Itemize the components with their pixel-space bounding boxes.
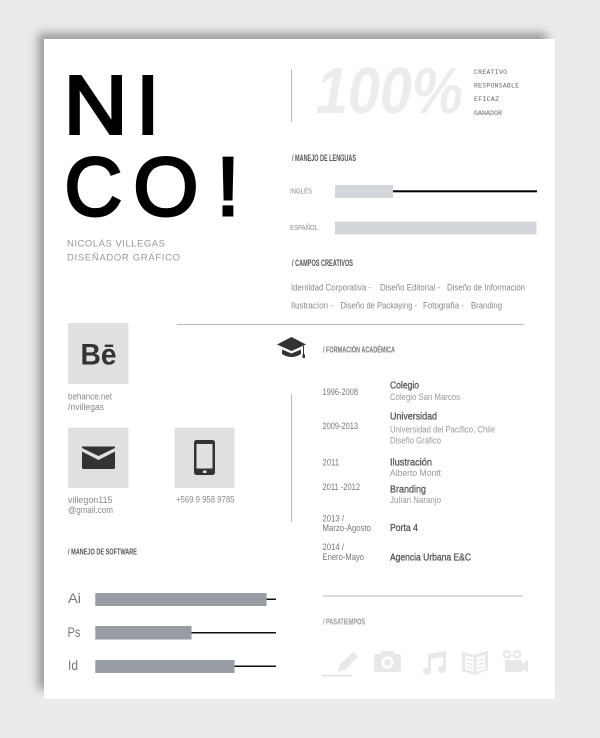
divider: top vertical line	[291, 69, 292, 122]
list: creative fields: Diseño de Packaying -	[340, 300, 417, 310]
list: creative fields: Identidad Corporativa -	[291, 282, 371, 292]
panel: behance contact: /nvillegas	[68, 402, 104, 412]
chart: languages	[290, 185, 537, 234]
entry: illustration: Alberto Montt	[390, 468, 441, 478]
icon: phone	[194, 440, 215, 475]
divider: lower horizontal rule	[323, 596, 523, 597]
entry: school: 1996-2008	[322, 387, 358, 397]
page shadow	[38, 33, 547, 689]
icon: graduation cap	[277, 337, 306, 358]
list: education timeline	[322, 380, 495, 564]
list: creative fields: Diseño Editorial -	[380, 282, 440, 292]
entry: Porta 4: 2013 /	[322, 514, 344, 524]
divider: education vertical line	[291, 394, 292, 522]
entry: illustration: 2011	[322, 458, 339, 468]
panel: email contact: villegon115	[68, 495, 112, 505]
title: NICO!	[64, 58, 240, 233]
panel: behance contact	[68, 323, 128, 412]
list: qualities: EFICAZ	[474, 96, 499, 103]
list: creative fields: Diseño de Información	[447, 282, 525, 292]
entry: school	[322, 380, 460, 402]
entry: Agencia Urbana	[322, 542, 471, 564]
title: NICO!: !	[216, 140, 240, 233]
name and role	[67, 238, 180, 264]
icon: pencil	[322, 652, 358, 676]
icon: behance: Bē	[80, 338, 116, 372]
list: qualities: GANADOR	[474, 110, 502, 117]
heading: hobbies: / PASATIEMPOS	[323, 616, 365, 626]
entry: university	[322, 412, 495, 446]
entry: university: Universidad del Pacífico, Chile	[390, 424, 495, 434]
entry: branding: Branding	[390, 484, 426, 496]
panel: email contact: @gmail.com	[68, 505, 113, 515]
icons: hobbies	[322, 650, 528, 676]
entry: illustration	[322, 458, 441, 478]
entry: Porta 4: Porta 4	[390, 523, 418, 534]
panel: behance contact: behance.net	[68, 392, 112, 402]
name and role: DISEÑADOR GRÁFICO	[67, 252, 180, 264]
entry: school: Colegio	[390, 380, 419, 392]
icon: film camera	[502, 650, 528, 672]
entry: branding	[322, 482, 441, 505]
list: creative fields	[291, 282, 525, 310]
panel: resume page	[44, 39, 555, 699]
panel: phone contact: +569 9 958 9785	[176, 494, 234, 504]
chart: software	[68, 590, 276, 673]
entry: illustration: Ilustración	[390, 458, 432, 468]
title: NICO!: C	[64, 140, 122, 233]
name and role: NICOLÁS VILLEGAS	[67, 238, 165, 250]
icon: camera	[374, 651, 401, 672]
title: NICO!: N	[64, 58, 128, 152]
icon: open book	[462, 650, 488, 675]
list: qualities	[474, 69, 519, 117]
entry: Porta 4	[322, 514, 418, 534]
entry: branding: Julían Naranjo	[390, 495, 441, 505]
list: qualities: CREATIVO	[474, 69, 507, 76]
heading: creative fields: / CAMPOS CREATIVOS	[292, 258, 353, 268]
entry: Porta 4: Marzo-Agosto	[322, 523, 371, 533]
panel: email contact	[68, 428, 128, 515]
entry: Agencia Urbana: Enero-Mayo	[322, 552, 364, 562]
list: qualities: RESPONSABLE	[474, 82, 519, 90]
list: creative fields: Branding	[471, 300, 502, 310]
list: creative fields: Fotografía -	[423, 300, 464, 310]
icon: envelope	[82, 446, 115, 469]
entry: university: 2009-2013	[322, 421, 358, 431]
entry: university: Universidad	[390, 412, 437, 422]
chart: languages: ESPAÑOL	[290, 223, 318, 232]
heading: education: / FORMACIÓN ACADÉMICA	[323, 344, 395, 354]
chart: software: Ai	[68, 590, 81, 606]
entry: Agencia Urbana: 2014 /	[322, 542, 344, 552]
entry: university: Diseño Gráfico	[390, 436, 441, 446]
chart: software: Id	[68, 657, 78, 673]
title: NICO!: I	[136, 58, 159, 152]
panel: phone contact	[174, 428, 234, 504]
heading: languages: / MANEJO DE LENGUAS	[292, 153, 356, 163]
entry: branding: 2011 -2012	[322, 482, 360, 492]
divider: upper horizontal rule	[177, 324, 524, 325]
chart: software: Ps	[68, 624, 80, 640]
entry: Agencia Urbana: Agencia Urbana E&C	[390, 552, 471, 564]
big number: 100%: 100%	[316, 54, 463, 127]
heading: software: / MANEJO DE SOFTWARE	[68, 546, 137, 556]
title: NICO!: O	[133, 140, 198, 233]
list: creative fields: Ilustracíon -	[291, 300, 333, 310]
entry: school: Colegio San Marcos	[390, 392, 460, 402]
chart: languages: INGLÉS	[290, 186, 312, 196]
icon: music notes	[423, 651, 446, 675]
